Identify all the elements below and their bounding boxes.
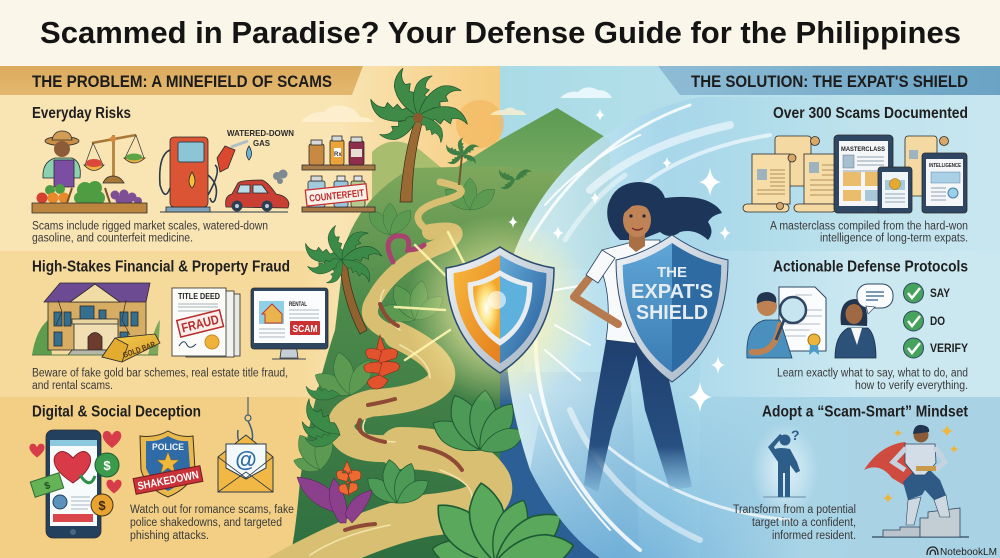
icon: forged title deed <box>172 288 240 357</box>
ribbon: shakedown: SHAKEDOWN <box>137 469 200 493</box>
icon: police shakedown badge <box>133 431 203 497</box>
panel: actionable defense protocols: how to verify everything. <box>855 380 968 392</box>
gold bar: GOLD BAR <box>122 340 157 360</box>
shield label: SHIELD <box>636 302 708 324</box>
tropical landscape <box>290 87 640 558</box>
description: Watch out for romance scams, fake <box>130 504 294 516</box>
arm on hip <box>574 277 618 324</box>
panel: digital and social deception <box>29 397 294 542</box>
purple leaves <box>297 477 372 523</box>
cash bill: $ <box>43 480 52 493</box>
heading: Digital & Social Deception <box>32 404 201 420</box>
panel: digital and social deception: phishing attacks. <box>130 530 209 542</box>
icon: man inspecting a document <box>747 287 826 358</box>
icon: market farmer with rigged scale <box>32 131 147 213</box>
heliconia flower upper <box>364 335 399 389</box>
background: problem side <box>0 66 500 558</box>
big shield <box>616 235 728 382</box>
label: watered-down gas: GAS <box>253 138 270 148</box>
sleeve <box>586 250 615 283</box>
car <box>226 180 289 208</box>
panel: over 300 scams documented: intelligence of long-term expats. <box>820 232 968 244</box>
icon: rental scam monitor: RENTAL <box>289 302 307 308</box>
panel: scam-smart mindset: informed resident. <box>772 530 856 542</box>
description: Beware of fake gold bar schemes, real estate title fraud, <box>32 368 288 380</box>
winding path <box>280 182 491 558</box>
heading: Everyday Risks <box>32 105 131 122</box>
description: A masterclass compiled from the hard-won <box>770 220 968 232</box>
icon: romance scam phone: $ <box>98 498 106 513</box>
shield label: EXPAT'S <box>631 281 713 303</box>
panel: high-stakes fraud <box>32 258 328 392</box>
panel: scam-smart mindset <box>733 404 969 542</box>
hero sparkles <box>883 425 958 503</box>
foreground leaves <box>426 480 577 558</box>
panel: everyday risks <box>32 105 375 244</box>
icon: confused figure <box>751 422 819 518</box>
icon: rental scam monitor: SCAM <box>292 324 318 335</box>
panel: everyday risks: gasoline, and counterfeit medicine. <box>32 232 193 244</box>
checklist: say: SAY <box>930 286 950 300</box>
light rays from the central shield <box>395 215 595 405</box>
icon: scrolls and tablets <box>743 135 967 213</box>
panel: over 300 scams documented <box>743 105 968 244</box>
tablet label: masterclass: MASTERCLASS <box>841 146 886 153</box>
description: Transform from a potential <box>733 504 856 516</box>
vegetation <box>297 67 577 558</box>
background: solution side <box>500 66 1000 558</box>
panel: high-stakes fraud: and rental scams. <box>32 380 113 392</box>
icon: phishing envelope and hook: @ <box>235 447 257 472</box>
description: Scams include rigged market scales, watered-down <box>32 220 268 232</box>
shield label: THE <box>657 264 687 281</box>
header ribbon: the solution <box>658 66 1000 95</box>
label: watered-down gas: WATERED-DOWN <box>227 128 294 138</box>
icon: rental scam monitor <box>251 288 328 359</box>
bush: mid foliage <box>363 389 528 510</box>
icon: police shakedown badge: POLICE <box>152 442 184 452</box>
checklist: do <box>904 311 945 331</box>
header ribbon: the solution: THE SOLUTION: THE EXPAT'S SHIELD <box>691 73 968 91</box>
background bushes <box>292 178 499 476</box>
woman holding the Expat's Shield <box>574 182 728 492</box>
tablet label: intelligence: INTELLIGENCE <box>929 163 961 169</box>
sparkles <box>508 109 731 412</box>
palm tree: lower <box>301 225 382 334</box>
header ribbon: the problem <box>0 66 363 95</box>
panel: actionable defense protocols <box>747 258 968 392</box>
icon: forged title deed: TITLE DEED <box>178 292 220 301</box>
icon: counterfeit medicine shelf: Rx <box>334 152 342 158</box>
torso and shirt <box>602 240 660 345</box>
header ribbon: the problem: THE PROBLEM: A MINEFIELD OF SCAMS <box>32 73 332 91</box>
icon: romance scam phone: $ <box>103 458 111 473</box>
heading: High-Stakes Financial & Property Fraud <box>32 258 290 276</box>
blue energy swirl <box>508 97 812 558</box>
face <box>629 232 645 252</box>
heading: Adopt a “Scam-Smart” Mindset <box>762 404 968 420</box>
bush: left edge palm fronds <box>298 385 344 449</box>
panel: scam-smart mindset: target into a confident, <box>752 517 856 529</box>
hair back <box>607 182 722 240</box>
checklist: do: DO <box>930 314 945 328</box>
title: Scammed in Paradise? Your Defense Guide for the Philippines <box>40 15 961 50</box>
NotebookLM watermark: NotebookLM <box>940 546 997 558</box>
snake on the path <box>388 236 424 262</box>
heading: Actionable Defense Protocols <box>773 258 968 276</box>
checklist: verify: VERIFY <box>930 341 968 355</box>
checklist: say <box>904 283 950 303</box>
icon: phishing envelope and hook <box>218 397 273 492</box>
panel: digital and social deception: police shakedowns, and targeted <box>130 517 282 529</box>
shield label <box>631 264 713 324</box>
legs <box>584 335 640 492</box>
icon: confused figure: ? <box>791 427 800 443</box>
title band <box>0 0 1000 66</box>
icon: romance scam phone <box>29 430 122 538</box>
label: watered-down gas <box>227 128 294 148</box>
stamp: counterfeit: COUNTERFEIT <box>309 188 365 205</box>
central shield icon <box>446 247 554 373</box>
heading: Over 300 Scams Documented <box>773 105 968 122</box>
icon: armored hero on steps <box>864 425 969 537</box>
icon: counterfeit medicine shelf <box>302 136 375 212</box>
stamp: fraud: FRAUD <box>180 312 220 335</box>
checklist: verify <box>904 338 968 358</box>
palm tree: small distant <box>443 138 533 192</box>
heliconia flower lower <box>337 461 361 496</box>
icon: mansion with gold bar <box>32 283 160 362</box>
description: Learn exactly what to say, what to do, and <box>777 368 968 380</box>
palm tree: large <box>367 67 469 202</box>
icon: woman with speech bubble <box>835 284 893 358</box>
icon: gas pump with watered-down gas <box>160 128 294 212</box>
